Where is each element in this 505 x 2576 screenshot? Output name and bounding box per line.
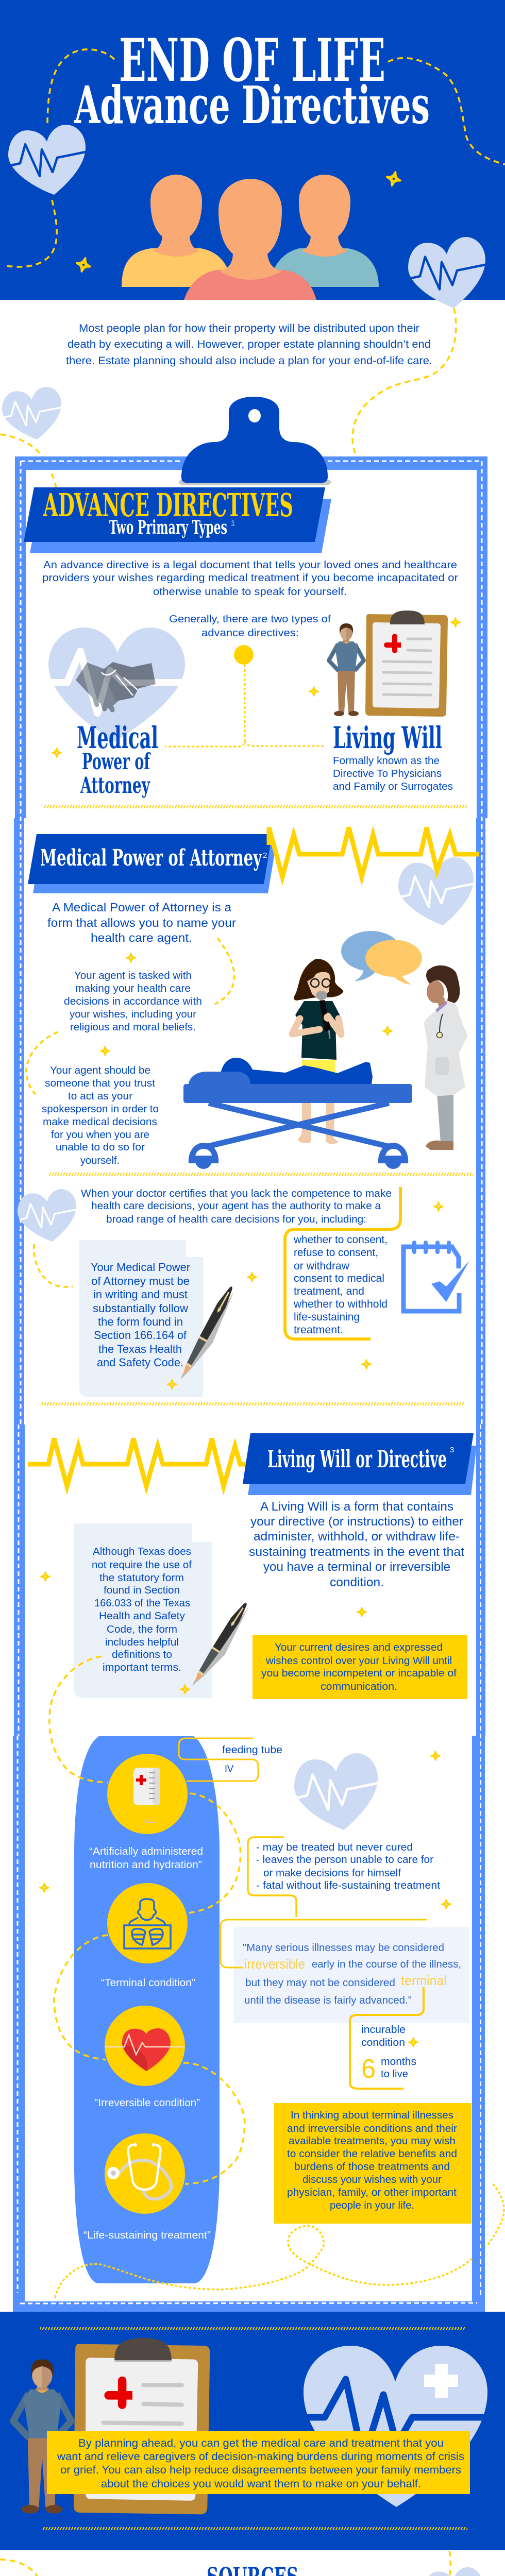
heading: living will: Directive To Physicians — [333, 768, 442, 779]
living will definition: you have a terminal or irreversible — [263, 1560, 450, 1574]
icon: heart with handshake — [48, 628, 185, 742]
paper note: medical POA form: substantially follow — [93, 1302, 188, 1315]
term: life-sustaining treatment — [83, 2133, 211, 2241]
connector: yellow node and dashed lines — [165, 645, 324, 747]
hatch divider — [42, 2527, 467, 2530]
intro text: death by executing a will. However, proper estate planning shouldn’t end — [68, 338, 431, 350]
quote box: irreversible vs terminal: terminal — [401, 1973, 447, 1988]
callout: current desires: wishes control over your Living Will until — [265, 1655, 452, 1667]
callout: current desires: communication. — [321, 1681, 397, 1692]
dashed path: left to clipboard — [0, 434, 57, 489]
paper note: Texas statutory form — [74, 1523, 212, 1698]
icon: star — [433, 1201, 444, 1212]
paper note: medical POA form: Your Medical Power — [91, 1261, 190, 1274]
paper note: Texas statutory form: Health and Safety — [99, 1610, 186, 1622]
list: decisions: whether to withhold — [293, 1298, 388, 1310]
list: decisions: consent to medical — [294, 1273, 384, 1284]
illustration: man with clipboard, closing — [13, 2338, 210, 2514]
icon: heart sources right — [424, 2567, 482, 2576]
term: artificially administered nutrition: nutrition and hydration” — [90, 1859, 202, 1871]
list: decisions: or withdraw — [294, 1260, 350, 1272]
advance directive definition: providers your wishes regarding medical treatment if you become incapacitated or — [42, 572, 458, 584]
banner: medical power of attorney: Medical Power of Attorney — [40, 845, 262, 871]
clipboard clip — [178, 397, 331, 485]
callout: current desires — [252, 1635, 467, 1699]
dashed path: loop at bottom — [55, 2183, 504, 2298]
illustration: speech bubbles — [341, 931, 422, 985]
icon: star — [384, 169, 403, 189]
quote box: irreversible vs terminal: until the disease is fairly advanced." — [244, 1994, 412, 2006]
bracket: decisions list — [285, 1187, 400, 1339]
icon: heart intro — [2, 387, 61, 439]
dashed path: top right — [388, 58, 505, 164]
callout: thinking about illnesses: to consider the relative benefits and — [287, 2148, 457, 2160]
paper note: Texas statutory form: not require the use of — [92, 1559, 192, 1571]
dashed path: right to clipboard — [352, 308, 456, 455]
heading: living will: Formally known as the — [333, 755, 440, 767]
paper note: medical POA form: and Safety Code. — [97, 1356, 183, 1369]
dashed path: circle two to three — [54, 1935, 108, 2060]
quote box: irreversible vs terminal: but they may not be considered — [245, 1977, 395, 1989]
term: artificially administered nutrition: “Artificially administered — [89, 1845, 203, 1857]
banner: living will or directive: 3 — [450, 1446, 454, 1454]
callout: feeding tube and IV: feeding tube — [222, 1744, 282, 1756]
hatch divider — [40, 2327, 465, 2330]
callout: terminal condition definition — [248, 1837, 440, 1917]
agent trust text: make medical decisions — [43, 1116, 157, 1128]
intro text — [66, 323, 432, 367]
callout: six months to live: months — [381, 2056, 416, 2067]
callout: terminal condition definition: or make decisions for himself — [263, 1867, 401, 1879]
dashed paths to source hearts — [0, 2551, 450, 2576]
icon: pen — [177, 1284, 241, 1384]
paper note: medical POA form: of Attorney must be — [91, 1275, 190, 1287]
hatch divider — [48, 1173, 474, 1176]
panel: blue terms column — [74, 1736, 220, 2283]
quote box: irreversible vs terminal: early in the course of the illness, — [312, 1958, 461, 1970]
term: terminal condition — [101, 1883, 195, 1989]
callout: terminal condition definition: - fatal without life-sustaining treatment — [256, 1879, 440, 1891]
clipboard frame — [13, 456, 487, 2312]
heartbeat line middle — [28, 1438, 247, 1486]
intro text: there. Estate planning should also include a plan for your end-of-life care. — [66, 355, 432, 367]
callout: feeding tube and IV: IV — [225, 1763, 233, 1775]
agent tasked text: decisions in accordance with — [64, 995, 202, 1007]
heading: medical power of attorney: Attorney — [80, 773, 150, 799]
doctor certifies text: When your doctor certifies that you lack the competence to make — [81, 1188, 392, 1199]
text: two types — [169, 613, 331, 639]
dashed curve — [215, 938, 234, 1004]
callout: planning ahead: or grief. You can also help reduce disagreements between your family members — [60, 2464, 461, 2476]
term: life-sustaining treatment: “Life-sustaining treatment” — [83, 2229, 211, 2241]
dashed path: circle one to two — [189, 1793, 241, 1913]
paper note: Texas statutory form: Code, the form — [107, 1623, 177, 1635]
callout: planning ahead — [47, 2431, 470, 2494]
callout: six months to live: 6 — [361, 2054, 376, 2084]
living will definition: sustaining treatments in the event that — [249, 1545, 464, 1559]
living will definition: A Living Will is a form that contains — [260, 1500, 453, 1514]
doctor certifies text — [81, 1188, 392, 1225]
doctor certifies text: health care decisions, your agent has the authority to make a — [91, 1200, 381, 1212]
callout: six months to live: condition — [361, 2037, 405, 2048]
quote box: irreversible vs terminal — [221, 1920, 469, 2023]
paper note: Texas statutory form: found in Section — [104, 1584, 180, 1596]
intro text: Most people plan for how their property will be distributed upon their — [79, 323, 419, 334]
agent tasked text — [64, 970, 202, 1033]
agent trust text: yourself. — [80, 1155, 120, 1166]
list: decisions: treatment. — [294, 1324, 343, 1336]
paper note: medical POA form: the Texas Health — [98, 1343, 182, 1355]
heading: medical power of attorney: Power of — [82, 749, 151, 775]
heading: medical power of attorney — [77, 720, 158, 799]
icon: notepad check — [403, 1241, 469, 1311]
agent trust text — [42, 1064, 159, 1166]
agent tasked text: your wishes, including your — [70, 1008, 196, 1020]
banner: advance directives: ADVANCE DIRECTIVES — [43, 486, 293, 524]
paper note: Texas statutory form: Although Texas does — [93, 1546, 191, 1557]
hatch divider — [41, 1402, 465, 1405]
heading: medical power of attorney: Medical — [77, 720, 158, 755]
paper note: Texas statutory form: the statutory form — [99, 1572, 184, 1584]
callout: planning ahead: want and relieve caregivers of decision-making burdens during moments of crisis — [57, 2451, 464, 2463]
dashed curve — [34, 1244, 73, 1287]
quote box: irreversible vs terminal: irreversible — [244, 1956, 305, 1972]
callout: thinking about illnesses: burdens of those treatments and — [294, 2161, 450, 2173]
list: decisions: refuse to consent, — [294, 1247, 378, 1259]
icon: heart left — [8, 125, 86, 195]
agent trust text: someone that you trust — [45, 1077, 155, 1089]
icon: stars section one — [52, 617, 461, 758]
agent trust text: to act as your — [68, 1090, 132, 1102]
icon: stars — [39, 1751, 451, 1909]
dashed path: section transition — [49, 1656, 108, 1783]
hatch divider — [44, 805, 468, 808]
banner: advance directives: Two Primary Types — [109, 517, 227, 538]
paper note: Texas statutory form: important terms. — [103, 1662, 181, 1673]
callout: current desires: Your current desires and expressed — [275, 1641, 443, 1653]
living will definition: your directive (or instructions) to either — [250, 1515, 463, 1529]
medical POA definition: form that allows you to name your — [47, 916, 236, 929]
callout: planning ahead: By planning ahead, you can get the medical care and treatment that you — [78, 2437, 444, 2449]
icon: heart right — [408, 237, 485, 308]
illustration: doctor — [424, 965, 467, 1150]
agent tasked text: religious and moral beliefs. — [70, 1021, 196, 1033]
dashed path: circle three to four — [183, 2063, 245, 2184]
living will definition — [249, 1500, 464, 1589]
callout: thinking about illnesses — [274, 2103, 472, 2224]
banner: advance directives — [24, 486, 331, 553]
icon: heart section two lower — [18, 1189, 76, 1242]
text: two types: Generally, there are two types of — [169, 613, 331, 625]
medical POA definition: A Medical Power of Attorney is a — [52, 901, 231, 914]
icon: heart section two — [398, 857, 474, 925]
illustration: three people — [122, 175, 379, 300]
advance directive definition: otherwise unable to speak for yourself. — [153, 586, 347, 598]
list: decisions: life-sustaining — [294, 1311, 360, 1323]
advance directive definition: An advance directive is a legal document that tells your loved ones and healthcare — [43, 559, 457, 571]
callout: six months to live: to live — [381, 2068, 408, 2080]
icon: heart section four — [294, 1753, 378, 1830]
medical POA definition: health care agent. — [91, 931, 192, 944]
paper note: Texas statutory form: includes helpful — [105, 1636, 179, 1648]
header band — [0, 0, 505, 300]
agent tasked text: Your agent is tasked with — [74, 970, 192, 981]
term: artificially administered nutrition — [89, 1754, 203, 1871]
term: terminal condition: “Terminal condition” — [101, 1977, 195, 1989]
agent tasked text: making your health care — [75, 982, 191, 994]
title — [74, 26, 430, 135]
callout: six months to live — [350, 1987, 424, 2089]
banner: medical power of attorney — [28, 834, 276, 893]
dashed curve — [26, 1032, 58, 1094]
agent trust text: Your agent should be — [50, 1064, 150, 1076]
callout: thinking about illnesses: discuss your wishes with your — [302, 2174, 442, 2185]
paper note: Texas statutory form: definitions to — [112, 1649, 172, 1660]
term: irreversible condition: "Irreversible condition” — [94, 2097, 200, 2109]
callout: six months to live: incurable — [361, 2024, 406, 2036]
medical POA definition — [47, 901, 236, 944]
icon: stars — [40, 1571, 367, 1694]
paper note: Texas statutory form: 166.033 of the Texas — [94, 1597, 190, 1609]
callout: feeding tube and IV — [179, 1738, 282, 1781]
icon: pen — [189, 1601, 255, 1691]
quote box: irreversible vs terminal: "Many serious illnesses may be considered — [243, 1942, 444, 1954]
heartbeat line top — [269, 827, 479, 877]
living will definition: condition. — [330, 1575, 384, 1589]
icon: star — [74, 255, 93, 275]
icon: stars — [167, 1272, 372, 1389]
callout: thinking about illnesses: and irreversible conditions and their — [287, 2123, 457, 2134]
list: decisions: whether to consent, — [293, 1234, 388, 1246]
agent trust text: unable to do so for — [56, 1141, 145, 1153]
icon: large heart with cross — [301, 2346, 490, 2507]
agent trust text: spokesperson in order to — [42, 1103, 159, 1115]
illustration: man with clipboard — [329, 611, 448, 717]
icon: star — [126, 953, 136, 963]
closing band — [0, 2312, 505, 2550]
callout: thinking about illnesses: people in your life. — [330, 2199, 414, 2211]
callout: terminal condition definition: - leaves the person unable to care for — [256, 1854, 433, 1866]
callout: thinking about illnesses: physician, family, or other important — [287, 2187, 457, 2198]
callout: terminal condition definition: - may be treated but never cured — [256, 1841, 413, 1853]
living will definition: administer, withhold, or withdraw life- — [254, 1530, 460, 1544]
heading: living will: and Family or Surrogates — [333, 781, 453, 792]
text: two types: advance directives: — [201, 627, 299, 639]
illustration: woman with microphone — [292, 959, 343, 1144]
agent trust text: for you when you are — [51, 1129, 149, 1141]
list: decisions — [293, 1234, 388, 1336]
heading: living will — [333, 720, 453, 792]
illustration: patient on gurney — [183, 1058, 412, 1169]
callout: thinking about illnesses: In thinking about terminal illnesses — [291, 2109, 453, 2121]
term: irreversible condition — [94, 2006, 200, 2109]
paper note: medical POA form: Section 166.164 of — [94, 1329, 187, 1342]
banner: living will or directive — [243, 1433, 477, 1495]
banner: medical power of attorney: 2 — [263, 851, 267, 860]
icon: star — [100, 1046, 110, 1056]
banner: advance directives: 1 — [231, 519, 235, 528]
doctor certifies text: broad range of health care decisions for you, including: — [106, 1213, 366, 1225]
list: decisions: treatment, and — [294, 1285, 364, 1297]
dashed path: top left — [6, 49, 114, 267]
icon: star — [382, 1026, 393, 1036]
callout: planning ahead: about the choices you would want them to make on your behalf. — [101, 2478, 421, 2490]
paper note: medical POA form: in writing and must — [93, 1288, 188, 1301]
advance directive definition — [42, 559, 458, 598]
callout: thinking about illnesses: available treatments, you may wish — [289, 2135, 456, 2147]
callout: current desires: you become incompetent or incapable of — [261, 1667, 457, 1679]
paper note: medical POA form: the form found in — [98, 1315, 183, 1328]
paper note: medical POA form — [79, 1240, 203, 1397]
